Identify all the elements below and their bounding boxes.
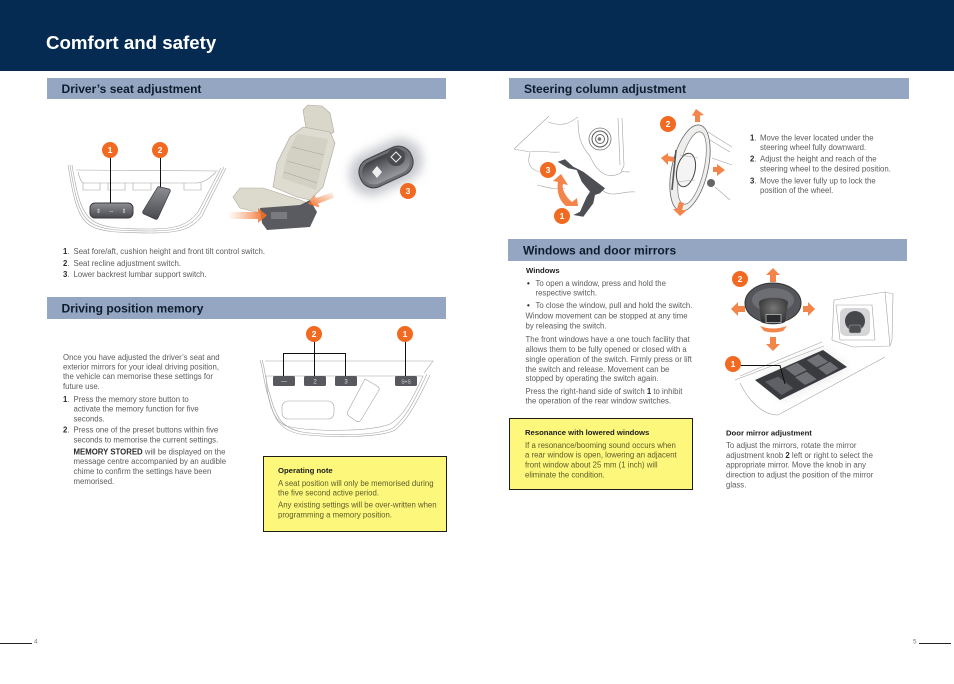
steering instructions: Adjust the height and reach of the (760, 154, 877, 164)
windows instructions: Press the right-hand side of switch 1 to inhibit (526, 387, 683, 396)
badge 1: 1 (560, 211, 565, 221)
memory instructions: exterior mirrors for your ideal driving position, (63, 362, 219, 372)
memory instructions: Once you have adjusted the driver’s seat and (63, 353, 220, 362)
callout: operating note (264, 456, 446, 532)
badge 2 (306, 326, 322, 342)
callout: resonance with lowered windows: If a resonance/booming sound occurs when (525, 441, 676, 450)
badge 2: 2 (312, 329, 317, 339)
badge 2: 2 (666, 119, 671, 129)
seat switch list: 2. (63, 259, 70, 268)
preset button 3: 3 (344, 380, 348, 386)
memory instructions: seconds to memorise the current settings. (74, 436, 218, 444)
badge 3: 3 (546, 165, 551, 175)
side mirror knob small (840, 308, 870, 336)
badge 1: 1 (403, 329, 408, 339)
memory instructions: chime to confirm the settings have been (74, 467, 211, 476)
badge 1 (102, 142, 118, 158)
memory instructions: Press the memory store button to (74, 395, 189, 404)
memory instructions: the vehicle can memorise these settings for (63, 372, 213, 381)
seat switch list: Seat recline adjustment switch. (74, 259, 181, 268)
windows instructions: To open a window, press and hold the (536, 279, 666, 288)
badge 1: 1 (108, 145, 113, 155)
callout: operating note: Operating note (278, 466, 333, 475)
steering instructions: 3. (750, 176, 757, 186)
badge 1 (725, 356, 741, 372)
preset button 1: — (281, 380, 287, 386)
callout: resonance with lowered windows: a rear window is open, lowering an adjacent (525, 450, 678, 460)
steering instructions: Move the lever fully up to lock the (760, 176, 876, 186)
windows instructions: • (527, 279, 530, 288)
switch 2 (143, 187, 170, 219)
windows instructions: allows them to be fully opened or closed with a (526, 345, 687, 354)
memory store button (395, 376, 417, 386)
door mirror adjustment text: direction to adjust the position of the mirror (726, 470, 874, 480)
memory instructions (63, 353, 226, 486)
callout: operating note: the five second active period. (278, 488, 379, 498)
switch 1: ⇕ (121, 208, 127, 215)
leader bracket (284, 340, 406, 376)
arrow: down (766, 337, 780, 351)
steering instructions: position of the wheel. (760, 186, 833, 195)
steering instructions: 2. (750, 154, 757, 164)
badge 2: 2 (738, 274, 743, 284)
windows instructions: The front windows have a one touch facility that (526, 335, 691, 344)
diagram: steering lever (514, 116, 635, 224)
callout: resonance with lowered windows: eliminate the condition. (525, 470, 605, 480)
heading: driving position memory (47, 297, 446, 319)
memory instructions: Press one of the preset buttons within five (74, 426, 218, 434)
door mirror adjustment text: adjustment knob 2 left or right to select the (726, 451, 873, 460)
steering instructions (750, 134, 891, 195)
seat switch list: Lower backrest lumbar support switch. (74, 270, 207, 279)
door mirror adjustment text (726, 428, 874, 490)
door mirror adjustment text: Door mirror adjustment (726, 428, 812, 438)
heading: windows and door mirrors (508, 239, 907, 261)
lumbar switch 3 (342, 131, 430, 203)
leader lines (110, 156, 160, 203)
seat switch list (63, 247, 265, 279)
callout: operating note: programming a memory position. (278, 510, 392, 520)
arrow: up (692, 109, 704, 122)
footer right: page number 5: 5 (913, 638, 917, 646)
windows instructions: To close the window, pull and hold the switch. (536, 301, 692, 310)
footer left: page number 4: 4 (34, 638, 38, 646)
seat switch list: Seat fore/aft, cushion height and front tilt control switch. (74, 247, 265, 256)
callout: resonance with lowered windows: Resonance with lowered windows (525, 428, 649, 437)
windows instructions: stopped by operating the switch again. (526, 374, 659, 383)
arrow: down (673, 202, 687, 216)
door mirror adjustment text: To adjust the mirrors, rotate the mirror (726, 441, 857, 450)
windows instructions: Window movement can be stopped at any time (526, 312, 688, 320)
seat switch list: 1. (63, 247, 70, 256)
switch 1: ⇕ (96, 208, 101, 215)
arrow: left (731, 302, 745, 316)
windows instructions (526, 266, 693, 406)
memory instructions: memorised. (74, 477, 114, 486)
memory instructions: 2. (63, 426, 70, 434)
heading: driver's seat adjustment: Driver’s seat adjustment (62, 82, 201, 96)
header band with title (0, 0, 954, 71)
arrow: right (803, 302, 815, 316)
preset button 3 (335, 376, 357, 386)
footer right: page number 5 (913, 638, 951, 646)
windows instructions: the switch and release. Movement can be (526, 365, 669, 374)
badge 1 (397, 326, 413, 342)
windows instructions: single operation of the switch. Firmly press or lift (526, 355, 693, 364)
panel: windows and door mirrors (508, 239, 907, 490)
windows instructions: Windows (526, 266, 560, 275)
preset button 1 (273, 376, 295, 386)
window switch panel (755, 350, 847, 400)
diagram: door memory buttons (260, 326, 433, 437)
windows instructions: • (527, 301, 530, 310)
heading: steering column adjustment: Steering column adjustment (524, 82, 686, 96)
badge 1: 1 (731, 359, 736, 369)
callout: resonance with lowered windows: front window about 25 mm (1 inch) will (525, 460, 658, 470)
leader line (738, 366, 785, 384)
arrow: up (766, 268, 780, 282)
illustration: seat (228, 105, 335, 230)
door mirror adjustment text: appropriate mirror. Move the knob in any (726, 460, 866, 470)
arrow: right (713, 164, 725, 176)
panel: driver's seat adjustment (47, 78, 446, 279)
mirror adjustment knob (731, 268, 815, 351)
steering instructions: Move the lever located under the (760, 134, 874, 142)
door mirror adjustment text: glass. (726, 480, 746, 490)
arrow: left (661, 153, 674, 165)
callout: resonance with lowered windows (510, 418, 692, 490)
heading: driving position memory: Driving position memory (62, 302, 204, 316)
diagram: mirror knob and window switches (725, 268, 893, 415)
callout: operating note: Any existing settings will be over-written when (278, 500, 437, 510)
badge 3: 3 (406, 186, 411, 196)
preset button 2 (304, 376, 326, 386)
memory instructions: future use. (63, 382, 100, 391)
steering instructions: 1. (750, 134, 757, 142)
arrow: right (308, 192, 334, 207)
memory instructions: activate the memory function for five (74, 404, 199, 414)
callout: operating note: A seat position will only be memorised during (278, 479, 434, 488)
windows instructions: by releasing the switch. (526, 322, 607, 330)
badge 2: 2 (158, 145, 163, 155)
panel: steering column adjustment (509, 78, 909, 224)
memory store button: S+S (401, 380, 411, 386)
switch 1 (90, 203, 133, 218)
title: Comfort and safety (46, 32, 217, 53)
switch 1: ⇔ (108, 209, 114, 215)
footer left: page number 4 (0, 638, 38, 646)
memory instructions: 1. (63, 395, 70, 404)
steering instructions: steering wheel to the desired position. (760, 164, 891, 174)
heading: windows and door mirrors: Windows and door mirrors (523, 244, 676, 258)
arrow: lever movement (553, 174, 578, 206)
diagram: door panel with seat switches (68, 142, 226, 233)
arrow: left (228, 208, 267, 223)
memory instructions: seconds. (74, 414, 105, 424)
steering instructions: steering wheel fully downward. (760, 143, 866, 152)
heading: steering column adjustment (509, 78, 909, 99)
panel: driving position memory (47, 297, 446, 532)
memory instructions: MEMORY STORED will be displayed on the (74, 448, 225, 456)
memory instructions: message centre accompanied by an audible (74, 457, 226, 466)
windows instructions: the operation of the rear window switches. (526, 396, 671, 406)
heading: driver's seat adjustment (47, 78, 446, 99)
lever (558, 159, 605, 217)
preset button 2: 2 (313, 380, 317, 386)
diagram: steering wheel (660, 109, 732, 216)
seat switch list: 3. (63, 270, 70, 279)
windows instructions: respective switch. (536, 288, 597, 298)
badge 2 (152, 142, 168, 158)
